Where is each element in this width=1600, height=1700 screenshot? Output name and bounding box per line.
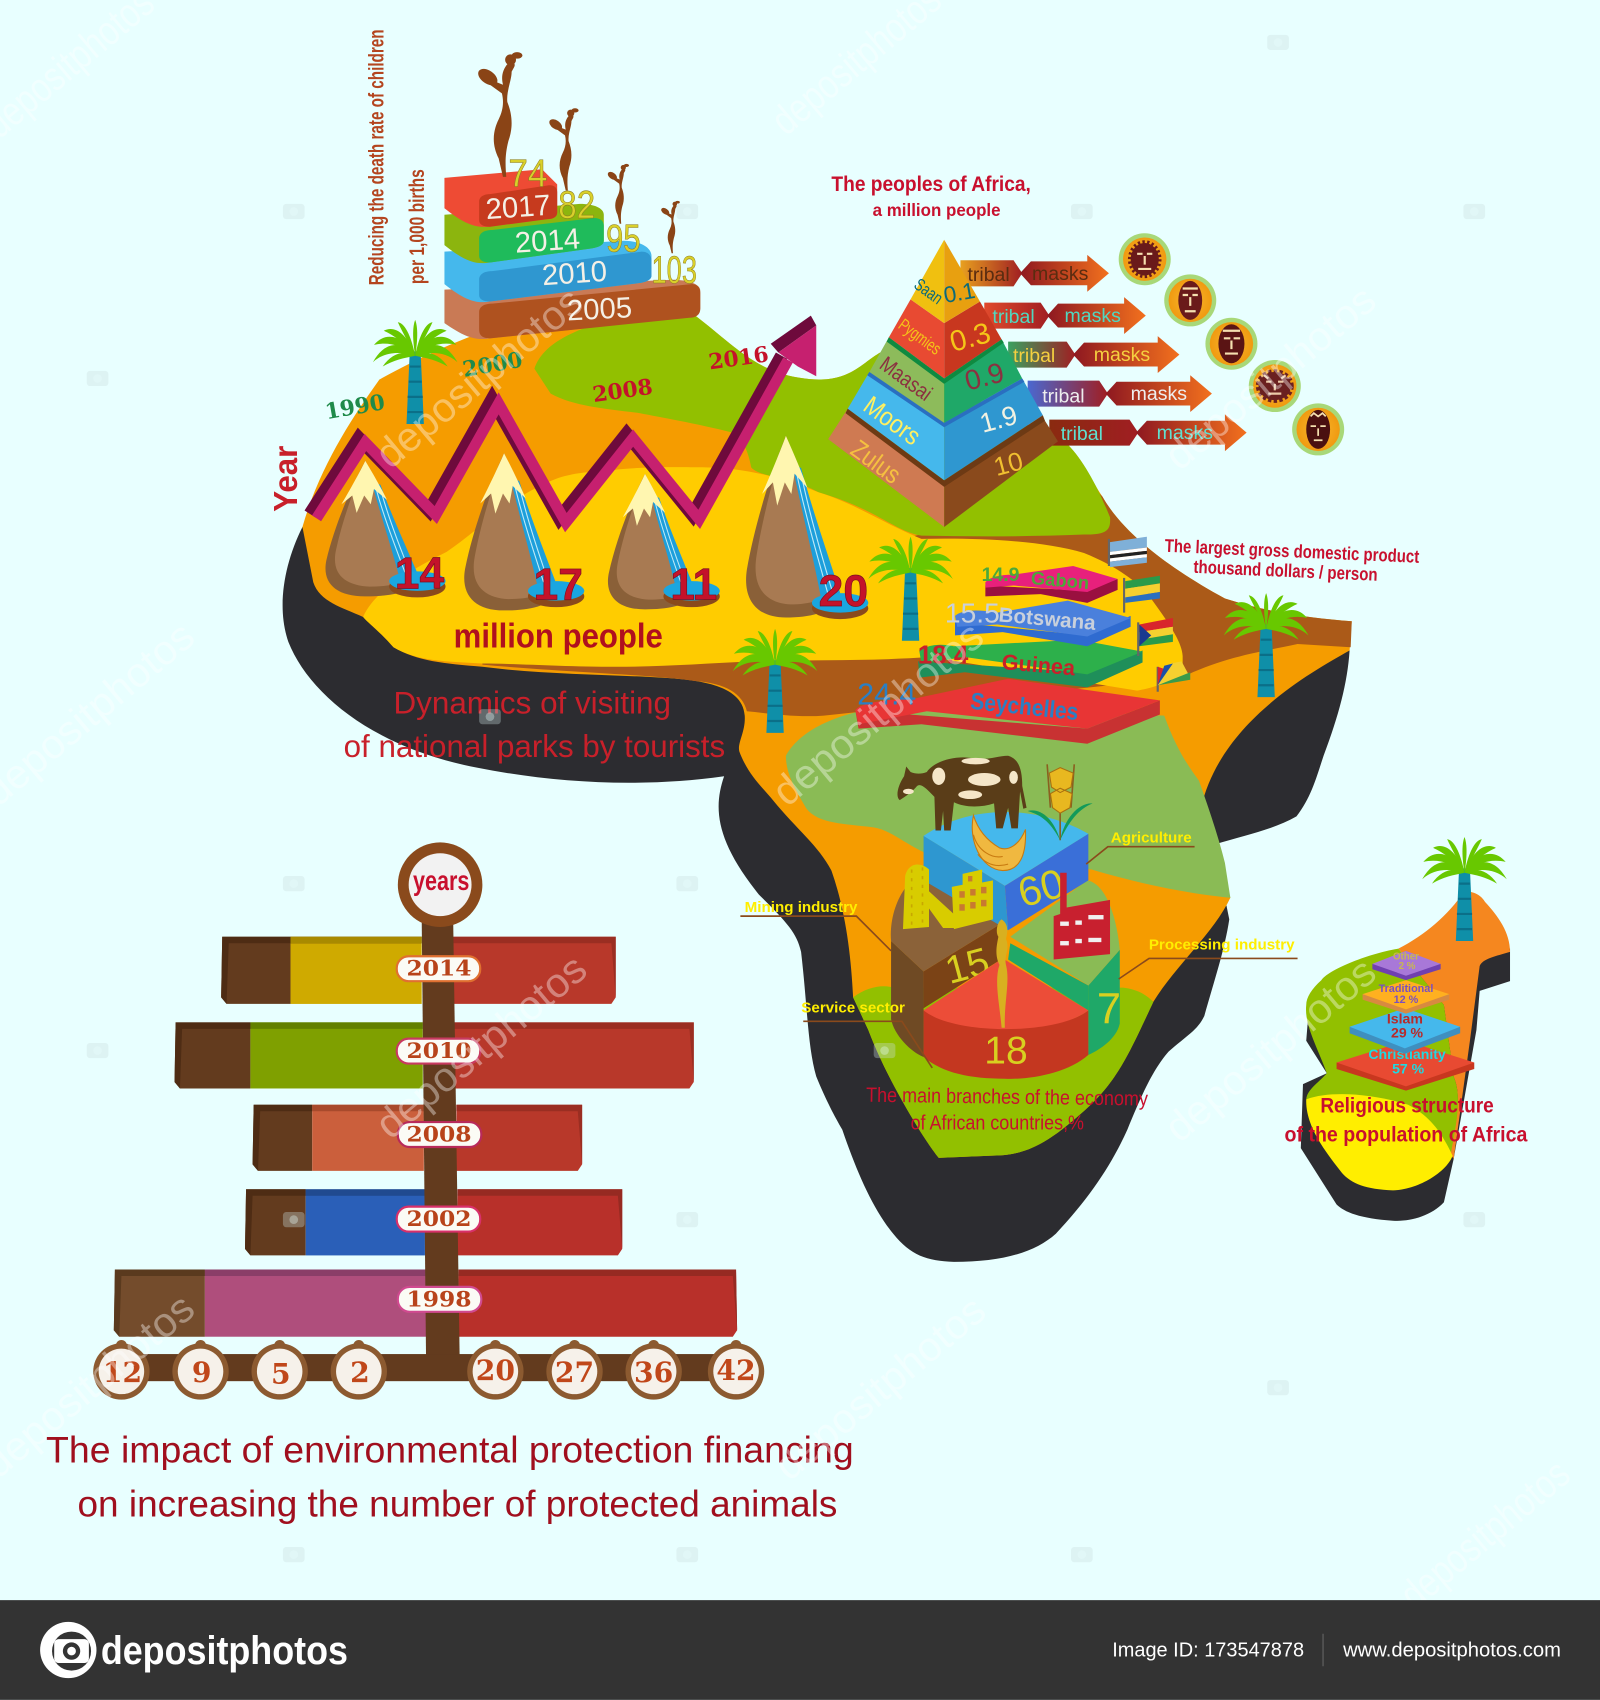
icon: tribal mask five xyxy=(1292,403,1344,455)
book: 2014: 2014 xyxy=(514,223,581,260)
book: 2010 xyxy=(444,241,651,302)
value: 36: 36 xyxy=(634,1356,673,1389)
map southern green region xyxy=(853,986,1153,1158)
chart: environmental financing bars xyxy=(46,842,854,1525)
map central light-green region xyxy=(786,705,1230,898)
year pill: 2010: 2010 xyxy=(407,1039,472,1064)
label: agriculture: Agriculture xyxy=(1111,829,1192,846)
arrow: row five xyxy=(1049,414,1247,451)
arrow: row four: tribal xyxy=(1042,385,1085,407)
heading: main branches of the economy: of African countries,% xyxy=(911,1112,1084,1135)
heading: impact of environmental protection: on increasing the number of protected animals xyxy=(78,1484,837,1525)
icon: palm tree north-west xyxy=(373,320,457,424)
slab: Seychelles xyxy=(855,679,1160,744)
bar: 2014 xyxy=(221,937,616,1004)
value: 42 xyxy=(708,1340,764,1400)
heading: reducing the death rate xyxy=(364,29,429,285)
mountain 2008: 11 xyxy=(670,561,717,610)
slab: Botswana: 15.5 xyxy=(945,596,1000,628)
label: processing industry xyxy=(1119,937,1298,979)
heading: peoples of Africa: a million people xyxy=(873,200,1001,220)
axis: brown pole and baseline xyxy=(136,916,743,1381)
value: 12 xyxy=(93,1340,150,1400)
watermark overlay: depositphotos xyxy=(1156,276,1385,479)
sector: services 15 brown xyxy=(891,873,1003,1057)
island orange surface xyxy=(1398,891,1510,1159)
watermark overlay: depositphotos xyxy=(367,945,595,1148)
icon: tribal mask one xyxy=(1119,233,1171,285)
icon: tribal mask four xyxy=(1249,360,1301,412)
chart: largest GDP slabs xyxy=(855,535,1420,744)
pyramid tier: Zulus: 10 xyxy=(990,446,1026,482)
year pill: 2008: 2008 xyxy=(407,1123,472,1148)
mountain 2016: 20 xyxy=(819,567,868,616)
slab: Guinea: Guinea xyxy=(1001,649,1077,680)
slab: Seychelles: Seychelles xyxy=(969,688,1080,726)
arrow: row two: masks xyxy=(1065,305,1121,327)
icon: depositphotos logo xyxy=(40,1622,96,1678)
icon: tribal mask two xyxy=(1164,274,1216,326)
value: 20 xyxy=(467,1340,524,1400)
heading: largest gross domestic product xyxy=(1164,535,1420,585)
arrow: row one: masks xyxy=(1032,263,1089,285)
flag: Guinea xyxy=(1138,618,1173,656)
flag: Gabon xyxy=(1124,576,1160,613)
heading: main branches of the economy xyxy=(866,1084,1149,1135)
values: death rate: 95 xyxy=(606,218,641,261)
heading: dynamics of visiting: Dynamics of visiting xyxy=(393,685,671,720)
book: 2014 xyxy=(444,204,604,263)
icon: factory xyxy=(1054,873,1110,959)
arrow: row five: masks xyxy=(1157,422,1213,444)
chart: child death rate books xyxy=(364,29,700,339)
arrow: row three: masks xyxy=(1094,344,1150,366)
icon: palm tree east xyxy=(1224,593,1308,697)
tier: Islam: Islam xyxy=(1387,1010,1423,1026)
book: 2005: 2005 xyxy=(566,292,633,328)
tier: Traditional: Traditional xyxy=(1379,983,1433,995)
flag: Botswana xyxy=(1109,537,1147,567)
footer logo text: depositphotos xyxy=(101,1629,348,1673)
bar: 2010 xyxy=(175,1022,694,1088)
book: 2005 xyxy=(444,280,700,339)
value: 2 xyxy=(331,1340,387,1400)
icon: palm tree on island xyxy=(1422,837,1507,941)
badge: years xyxy=(398,842,482,927)
arrow: row three xyxy=(1008,336,1179,373)
icon: wheat plant xyxy=(1028,764,1093,840)
tier: Islam xyxy=(1350,1008,1460,1054)
chart: peoples of Africa pyramid xyxy=(828,171,1344,527)
slab: Botswana xyxy=(945,596,1131,646)
map base shadow xyxy=(283,527,1350,1262)
label: agriculture xyxy=(1086,829,1195,864)
heading: impact of environmental protection: The impact of environmental protection financing xyxy=(46,1429,854,1470)
value: 5: 5 xyxy=(271,1357,291,1390)
year pill: 1998: 1998 xyxy=(407,1287,472,1312)
label: mining industry: Mining industry xyxy=(745,899,858,916)
sector: red 18: 18 xyxy=(984,1030,1028,1073)
value: 36 xyxy=(625,1340,682,1400)
watermark overlay: depositphotos xyxy=(1156,948,1385,1151)
value: 9: 9 xyxy=(192,1356,211,1389)
chart: religious structure xyxy=(1285,951,1528,1147)
arrow: row two: tribal xyxy=(992,306,1035,328)
book: 2010: 2010 xyxy=(541,256,608,292)
heading: peoples of Africa xyxy=(831,171,1031,220)
value: 20: 20 xyxy=(476,1354,515,1387)
heading: religious structure: of the population of Africa xyxy=(1285,1122,1528,1147)
flag: Seychelles xyxy=(1158,661,1190,692)
pyramid tier: Moors: 1.9 xyxy=(976,399,1021,439)
sector: processing 7 green xyxy=(1008,880,1121,1055)
year pill: 2014: 2014 xyxy=(407,957,472,982)
bar: 2008 xyxy=(253,1105,582,1171)
heading: peoples of Africa: The peoples of Africa, xyxy=(831,171,1031,196)
pyramid tier: Saan: Saan xyxy=(911,274,947,308)
slab: Gabon: Gabon xyxy=(1030,567,1090,593)
heading: dynamics of visiting xyxy=(344,685,725,764)
watermark overlay: depositphotos xyxy=(765,1287,994,1489)
value: 5 xyxy=(251,1340,308,1400)
sector: agriculture cube 60 xyxy=(924,812,1088,930)
watermark overlay: depositphotos xyxy=(763,612,992,815)
tier: Islam: 29 % xyxy=(1391,1025,1424,1041)
year labels: 2016 xyxy=(707,342,770,375)
arrow: row four xyxy=(1028,375,1212,412)
slab: Botswana: Botswana xyxy=(998,603,1097,635)
tier: Other xyxy=(1372,951,1441,980)
pyramid tier: Maasai xyxy=(867,337,1024,427)
heading: religious structure: Religious structure xyxy=(1320,1092,1494,1117)
arrow: row one: tribal xyxy=(967,264,1010,286)
book: 2017: 2017 xyxy=(485,190,552,226)
arrow: row five: tribal xyxy=(1061,423,1103,445)
slab: Seychelles: 24.4 xyxy=(857,679,916,712)
year labels xyxy=(323,342,770,425)
icon: cow xyxy=(897,756,1027,830)
year labels: 1990 xyxy=(323,390,387,425)
heading: reducing the death rate: per 1,000 births xyxy=(404,169,429,284)
value: 27: 27 xyxy=(555,1356,594,1389)
scale values xyxy=(93,1340,764,1400)
icon: golden figure xyxy=(996,919,1007,1028)
pyramid tier: Pygmies xyxy=(887,299,1004,384)
year pill: 2002: 2002 xyxy=(407,1207,472,1232)
tier: Traditional: 12 % xyxy=(1394,994,1419,1006)
values: death rate: 74 xyxy=(508,153,547,196)
value: 42: 42 xyxy=(716,1354,756,1387)
watermark camera marks xyxy=(87,35,1485,1562)
pyramid tier: Pygmies: Pygmies xyxy=(895,314,945,359)
slab: Gabon xyxy=(982,564,1118,603)
bar: 1998 xyxy=(114,1270,737,1337)
watermark overlay: depositphotos xyxy=(366,278,591,477)
pyramid tier: Zulus: Zulus xyxy=(845,434,907,490)
label: processing industry: Processing industry xyxy=(1149,937,1295,954)
footer image id: Image ID: 173547878 xyxy=(1112,1639,1304,1662)
sector: red 18 xyxy=(924,958,1088,1079)
mountain 2000 xyxy=(464,453,584,610)
tier: Other: 2 % xyxy=(1399,961,1416,972)
bar: 2002 xyxy=(245,1189,622,1255)
values: death rate xyxy=(508,153,697,292)
values: death rate: 82 xyxy=(558,184,595,227)
sector: processing 7 green: 7 xyxy=(1097,985,1121,1033)
slab: Gabon: 14.9 xyxy=(982,564,1020,586)
pyramid tier: Saan xyxy=(911,240,980,323)
island green surface xyxy=(1306,949,1458,1156)
pyramid tier: Maasai: 0.9 xyxy=(961,356,1007,397)
tier: Other: Other xyxy=(1393,951,1419,962)
icon: tribal mask three xyxy=(1205,318,1257,370)
map green north region xyxy=(534,314,1110,536)
heading: largest gross domestic product: The largest gross domestic product xyxy=(1164,535,1420,567)
tier: Christianity: Christianity xyxy=(1368,1046,1446,1062)
tier: Traditional xyxy=(1363,980,1449,1014)
value: 27 xyxy=(546,1340,603,1400)
chart: main branches of the economy xyxy=(740,756,1298,1135)
icon: palm tree west xyxy=(733,629,817,733)
figures: women with children xyxy=(475,52,680,253)
book: 2017 xyxy=(444,169,557,227)
footer bar xyxy=(0,1600,1600,1700)
slab: Guinea xyxy=(918,640,1143,687)
heading: religious structure xyxy=(1285,1092,1528,1147)
island yellow surface xyxy=(1306,1094,1453,1190)
icon: mine buildings xyxy=(903,864,993,929)
mountain 2000: 17 xyxy=(534,561,583,610)
arrow: row four: masks xyxy=(1131,383,1187,405)
heading: dynamics of visiting: of national parks by tourists xyxy=(344,729,725,764)
island of Madagascar xyxy=(1301,837,1510,1221)
value: 9 xyxy=(172,1340,229,1400)
footer website: www.depositphotos.com xyxy=(1342,1639,1561,1662)
year labels: 2008 xyxy=(591,375,654,408)
map yellow region xyxy=(363,467,1183,691)
pyramid tier: Pygmies: 0.3 xyxy=(947,317,994,359)
tier: Christianity xyxy=(1337,1041,1474,1091)
heading: main branches of the economy: The main branches of the economy xyxy=(866,1084,1149,1111)
pyramid tier: Zulus xyxy=(828,409,1058,527)
heading: impact of environmental protection xyxy=(46,1429,854,1525)
island base shadow xyxy=(1301,949,1510,1221)
arrow: row three: tribal xyxy=(1013,345,1055,367)
label: service sector xyxy=(801,1000,932,1068)
pyramid tier: Moors xyxy=(846,372,1045,487)
mountain 2016 xyxy=(746,436,868,619)
tier: Christianity: 57 % xyxy=(1392,1060,1425,1076)
map brown region xyxy=(482,477,1352,716)
pyramid tier: Moors: Moors xyxy=(858,390,927,451)
mountain 2008 xyxy=(608,474,720,610)
icon: palm tree centre xyxy=(868,537,953,641)
arrow: zigzag trend line xyxy=(310,316,816,523)
badge: years: years xyxy=(413,864,469,896)
map of Africa xyxy=(283,314,1352,1262)
arrows: tribal masks xyxy=(960,255,1247,451)
pyramid tier: Saan: 0.1 xyxy=(941,277,977,308)
chart: national park visits xyxy=(268,316,868,764)
slab: Guinea: 18.4 xyxy=(918,640,969,670)
value: 12: 12 xyxy=(103,1356,142,1389)
label: service sector: Service sector xyxy=(801,1000,905,1017)
year labels: 2000 xyxy=(461,348,525,383)
axis label: year: Year xyxy=(268,446,305,512)
sector: services 15 brown: 15 xyxy=(941,940,994,993)
arrow: row two xyxy=(984,297,1146,334)
label: mining industry xyxy=(740,899,891,951)
icon: bananas xyxy=(972,815,1026,871)
mountain 1990: 14 xyxy=(395,550,445,599)
heading: largest gross domestic product: thousand dollars / person xyxy=(1193,556,1378,585)
map orange surface xyxy=(302,314,1352,1158)
pyramid tier: Maasai: Maasai xyxy=(875,351,937,406)
values: death rate: 103 xyxy=(651,249,697,292)
mountain 1990 xyxy=(325,461,446,599)
arrow: row one xyxy=(960,255,1109,292)
axis label: million people: million people xyxy=(454,617,663,655)
value: 2: 2 xyxy=(350,1356,370,1389)
sector: agriculture cube 60: 60 xyxy=(1013,860,1069,916)
